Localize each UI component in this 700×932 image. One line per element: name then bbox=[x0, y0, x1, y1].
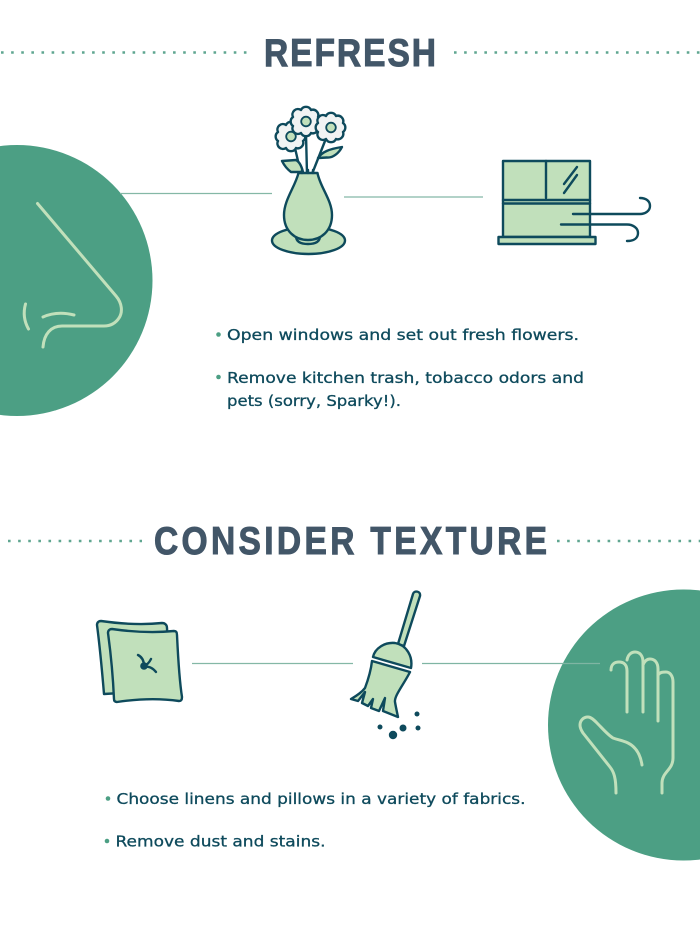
flower right bbox=[316, 113, 345, 142]
bullet: remove odors: pets (sorry, Sparky!). bbox=[227, 392, 401, 410]
panel: consider texture bbox=[8, 519, 700, 860]
icon: pillows bbox=[97, 621, 182, 702]
icon: broom and dust bbox=[351, 592, 420, 739]
icon: window with breeze bbox=[498, 161, 650, 244]
text: refresh bullets bbox=[216, 326, 584, 410]
panel: refresh bbox=[0, 31, 700, 416]
icon: hand in green circle bbox=[422, 590, 700, 860]
bullet: open windows: Open windows and set out fresh flowers. bbox=[227, 326, 579, 344]
flower middle bbox=[291, 107, 320, 136]
bullet: dust: Remove dust and stains. bbox=[116, 832, 326, 850]
flower left bbox=[276, 122, 305, 151]
connector: vase to window bbox=[344, 196, 483, 198]
heading: consider texture: CONSIDER TEXTURE bbox=[154, 519, 547, 563]
bullet: remove odors bbox=[216, 369, 584, 410]
connector: nose to vase bbox=[120, 192, 272, 194]
heading: refresh: REFRESH bbox=[264, 31, 436, 75]
bullet: linens: Choose linens and pillows in a variety of fabrics. bbox=[116, 790, 526, 808]
bullet: remove odors: Remove kitchen trash, tobacco odors and bbox=[227, 369, 584, 387]
icon: nose in green circle bbox=[0, 145, 152, 416]
connector: pillows to broom bbox=[192, 662, 353, 664]
text: texture bullets bbox=[105, 790, 525, 850]
icon: vase with flowers bbox=[272, 107, 345, 254]
